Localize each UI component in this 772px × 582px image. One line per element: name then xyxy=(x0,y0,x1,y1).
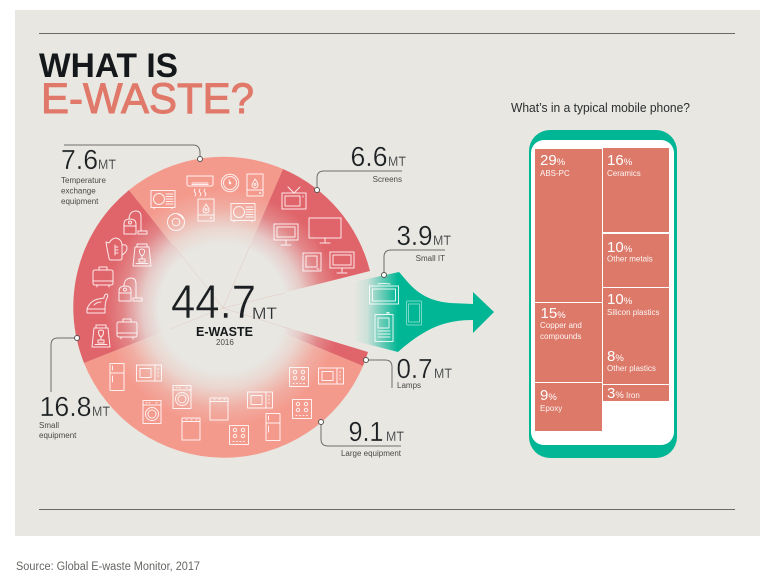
phone treemap xyxy=(529,130,677,458)
cell: copper and compounds: Copper and xyxy=(540,321,582,330)
cell: silicon and other plastics: Silicon plastics xyxy=(607,308,659,317)
callout: lamps: MT xyxy=(434,365,452,381)
centre total: 2016 xyxy=(216,338,234,347)
callout: temperature exchange: equipment xyxy=(61,197,99,206)
top rule xyxy=(39,33,735,34)
cell: other metals: Other metals xyxy=(607,254,653,264)
cell: silicon and other plastics: 10% xyxy=(607,291,633,308)
cell: iron: Iron xyxy=(626,391,640,400)
pie chart: e-waste categories xyxy=(73,157,494,458)
wedge: screens xyxy=(223,169,370,308)
cell: copper and compounds: 15% xyxy=(540,305,566,322)
phone heading: What’s in a typical mobile phone? xyxy=(511,101,690,115)
callout: screens: Screens xyxy=(373,175,402,184)
callout: large equipment: Large equipment xyxy=(341,449,402,458)
callout: small IT: MT xyxy=(433,232,451,248)
callout: lamps: 0.7 xyxy=(396,353,432,384)
callout: large equipment: MT xyxy=(386,428,404,444)
cell: epoxy xyxy=(535,383,602,431)
callout: screens xyxy=(314,141,406,192)
cell: ceramics: 16% xyxy=(607,152,633,169)
callout: temperature exchange: 7.6 xyxy=(61,144,98,175)
centre glow xyxy=(105,190,341,426)
callout: large equipment xyxy=(318,416,404,458)
callout: temperature exchange xyxy=(61,144,202,206)
callout: temperature exchange: MT xyxy=(98,156,116,172)
wedge: small IT arrow xyxy=(343,272,494,352)
callout: small IT xyxy=(382,220,451,278)
callout: screens: MT xyxy=(388,153,406,169)
cell: iron: 3% xyxy=(607,385,624,402)
cell: silicon and other plastics xyxy=(603,288,669,384)
cell: copper and compounds xyxy=(535,303,602,382)
callout: small IT: 3.9 xyxy=(396,220,432,251)
phone body xyxy=(529,130,677,458)
bottom rule xyxy=(39,509,735,510)
cell: ceramics xyxy=(603,148,669,232)
cell: iron xyxy=(603,385,669,402)
callout: small equipment xyxy=(39,336,110,440)
cell: other metals: 10% xyxy=(607,239,633,256)
callout: large equipment: 9.1 xyxy=(348,416,384,447)
icons: screens xyxy=(274,187,354,273)
wedge: temperature exchange equipment xyxy=(129,157,283,308)
callout: small equipment: equipment xyxy=(39,431,77,440)
cell: epoxy: 9% xyxy=(540,387,557,404)
faint wedge divider lines xyxy=(170,245,290,329)
callout: temperature exchange: exchange xyxy=(61,186,96,196)
wedge: large equipment xyxy=(84,308,363,458)
callout: temperature exchange: Temperature xyxy=(61,176,106,185)
icons: small IT xyxy=(370,284,422,342)
centre total xyxy=(171,275,277,347)
cell: ceramics: Ceramics xyxy=(607,169,641,178)
cell: silicon and other plastics: 8% xyxy=(607,348,624,365)
cell: ABS-PC: ABS-PC xyxy=(540,169,570,178)
callout: small equipment: Small xyxy=(39,421,59,430)
cell: ABS-PC xyxy=(535,149,602,302)
cell: ABS-PC: 29% xyxy=(540,152,566,169)
wedge: small equipment xyxy=(73,190,223,363)
centre total: 44.7 xyxy=(171,275,256,328)
icons: temperature exchange xyxy=(151,174,263,230)
centre total: E-WASTE xyxy=(196,324,253,339)
callout: lamps: Lamps xyxy=(397,381,421,390)
wedge: lamps xyxy=(223,308,368,366)
callout: small equipment: 16.8 xyxy=(40,391,92,422)
centre total: MT xyxy=(252,304,277,323)
cell: other metals xyxy=(603,234,669,287)
callout: small IT: Small IT xyxy=(416,254,445,263)
icons: large equipment xyxy=(110,364,344,444)
icons: small equipment xyxy=(87,211,151,347)
phone screen xyxy=(531,140,674,445)
title xyxy=(39,47,254,123)
title: WHAT IS xyxy=(39,47,178,85)
source: Source: Global E-waste Monitor, 2017 xyxy=(16,561,200,573)
callout: screens: 6.6 xyxy=(350,141,388,172)
cell: silicon and other plastics: Other plastics xyxy=(607,364,656,373)
callout: lamps xyxy=(364,353,452,390)
cell: copper and compounds: compounds xyxy=(540,332,581,341)
title: E-WASTE? xyxy=(41,75,254,123)
callout: small equipment: MT xyxy=(92,403,110,419)
cell: epoxy: Epoxy xyxy=(540,404,562,413)
